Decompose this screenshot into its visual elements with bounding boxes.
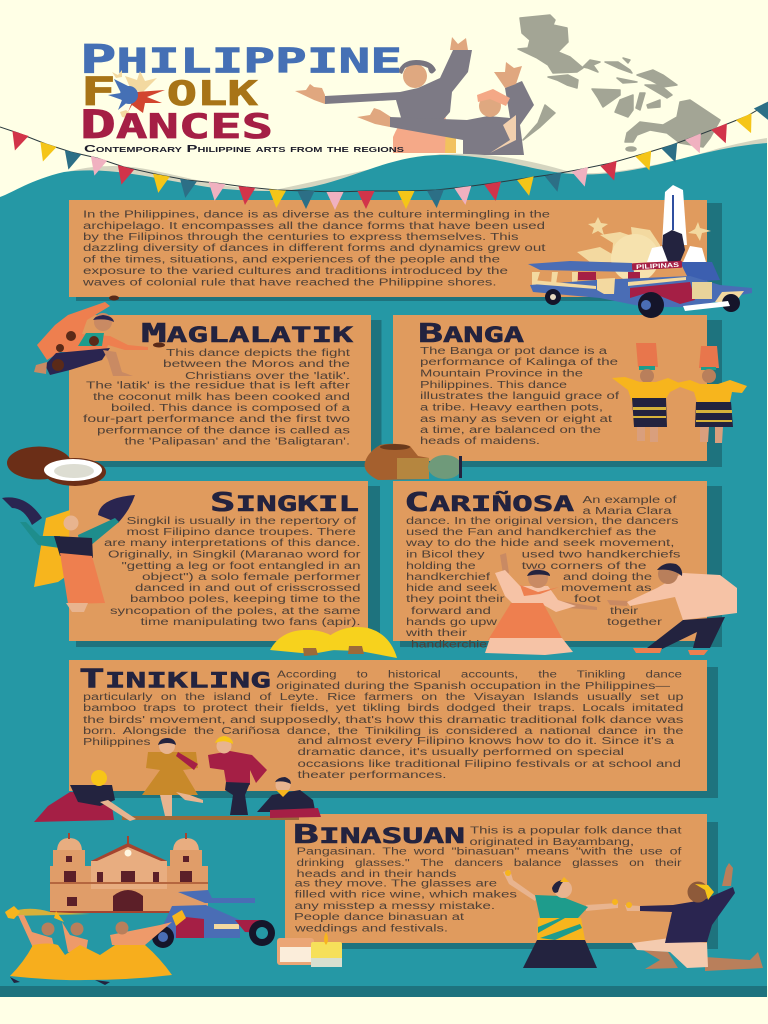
Tinikling text: occasions like traditional Filipino festivals or at school and [298,759,681,770]
Tinikling text: born. Alongside the Cariñosa dance, the Tinikiling is considered a national dance in the [83,726,684,737]
Binasuan text: originated in Bayambang, [470,837,634,848]
icon: jeepney and monument: PILIPINAS [636,262,680,271]
Maglalatik text: the coconut milk has been cooked and [93,392,350,403]
Cariñosa text: forward and [411,606,491,617]
Cariñosa text: their [610,606,639,617]
Banga text: Mountain Province in the [420,368,584,380]
panel: Cariñosa [393,481,722,650]
Singkil text: most Filipino dance troupes. There [126,527,357,538]
Maglalatik text: The 'latik' is the residue that is left after [86,380,351,392]
Tinikling text: bamboo traps to protect their fields, yet tikling birds dodged their traps. Locals imitated [83,703,684,714]
intro text: of the times, situations, and experiences of the people and the [83,254,501,266]
Maglalatik text: This dance depicts the fight [166,348,350,359]
Cariñosa text: and doing the [563,572,653,583]
bunting flags [0,101,768,210]
Tinikling text: dramatic dance, it's usually performed on special [298,747,624,758]
Cariñosa text: with their [404,628,468,639]
Banga text: heads of maidens. [420,436,540,447]
panel: introduction [69,200,722,301]
Singkil text: Originally, in Singkil (Maranao word for [108,550,362,560]
Tinikling text: particularly on the island of Leyte. Rice farmers on the Visayan Islands usually set up [83,692,684,703]
Maglalatik text [83,348,351,448]
Cariñosa text: handkerchie [411,640,488,650]
icon: Binasuan couple [503,863,763,971]
Maglalatik text: four-part performance and the first two [83,414,351,425]
Cariñosa text: they point their [406,594,506,605]
Tinikling text: the birds' movement, and supposedly, that's how this dramatic traditional folk dance was [83,715,684,726]
title line: Folk: F OLK [81,69,258,115]
Singkil text: Singkil is usually in the repertory of [126,516,356,527]
seated woman [34,770,136,822]
title line: Philippine: P HILIPPINE [80,38,402,82]
icon: yellow fans [270,627,397,658]
Banga text: illustrates the languid grace of [420,391,619,402]
Banga text: The Banga or pot dance is a [420,346,608,357]
Maglalatik text: boiled. This dance is composed of a [111,403,351,414]
man in red [208,736,267,815]
Maglalatik text: Christians over the 'latik'. [185,371,350,382]
heading: Maglalatik: M AGLALATIK [141,319,354,349]
icon: coconut [7,446,106,486]
panel: Maglalatik [69,315,382,467]
Cariñosa text: An example of [582,495,677,506]
Binasuan text: as they move. The glasses are [294,878,498,890]
panel: Singkil [69,481,380,647]
icon: Tinikling dancers [34,736,321,822]
Banga text: a time, are balanced on the [420,425,602,436]
icon: Singkil dancer [2,495,135,612]
intro text: dazzling diversity of dances in different forms and dynamics grew out [83,243,546,254]
Tinikling text: and almost every Filipino knows how to do it. Since it's a [298,736,675,747]
Cariñosa text: holding the [406,561,476,572]
Binasuan woman [503,870,618,968]
Tinikling text: According to historical accounts, the Tinikling dance [277,670,683,680]
intro text: archipelago. It encompasses all the dance forms that have been used [83,221,545,232]
title line: Dances: D ANCES [80,103,273,148]
icon: tricycle [152,890,275,948]
Singkil text: danced in and out of crisscrossed [135,583,360,594]
Cariñosa woman [485,553,597,655]
Cariñosa man [607,563,737,655]
Banga text: as many as seven or eight at [420,414,612,425]
Maglalatik text: performance of the dance is called as [97,426,350,436]
Cariñosa text: hands go upw [406,617,498,628]
Tinikling text: Philippines [83,737,151,748]
icon: candles [277,932,342,967]
Cariñosa text: used two handkerchiefs [522,550,681,560]
Binasuan text: any misstep a messy mistake. [294,901,495,912]
Cariñosa text: a Maria Clara [582,506,672,517]
Cariñosa text: way to do the hide and seek movement, [404,538,674,549]
intro text: by the Filipinos through the centuries to express themselves. This [83,232,519,243]
Cariñosa text: two corners of the [522,561,647,572]
title [80,38,405,155]
footer band [0,986,767,997]
Binasuan man [625,863,763,971]
heading: Singkil: S INGKIL [210,488,359,518]
panel: Binasuan [285,814,718,949]
intro text [81,210,551,288]
Binasuan text: Pangasinan. The word "binasuan" means "with the use of [296,846,682,858]
heading: Tinikling: T INIKLING [79,665,271,695]
dancer two [672,346,747,443]
Cariñosa text: handkerchief [406,572,490,583]
Tinikling text [83,670,684,781]
Cariñosa text: dance. In the original version, the dancers [406,516,679,527]
Tinikling text: originated during the Spanish occupation in the Philippines— [276,681,670,692]
icon: Philippine sun [108,70,165,118]
icon: jeepney and monument [528,185,752,318]
Binasuan text: drinking glasses." The dancers balance glasses on their [296,858,683,869]
kneeling man [257,777,321,818]
Banga text: performance of Kalinga of the [420,357,619,368]
Binasuan text: weddings and festivals. [293,924,448,934]
heading: Cariñosa: C ARIÑOSA [404,488,575,518]
Banga text [420,346,619,447]
Binasuan text: People dance binasuan at [294,912,464,923]
Tinikling text: theater performances. [298,770,446,781]
Binasuan text: heads and in their hands [296,869,457,880]
Singkil text: syncopation of the poles, at the same [110,606,361,617]
beige wave [50,138,767,200]
Binasuan text [293,826,683,934]
Singkil text: are many interpretations of this dance. [104,538,360,549]
Singkil text [104,516,362,628]
Binasuan text: filled with rice wine, which makes [294,890,517,900]
intro text: exposure to the varied cultures and traditions introduced by the [83,266,509,277]
Singkil text: "getting a leg or foot entangled in an [122,561,360,572]
woman in stripes [142,738,203,816]
subtitle: Contemporary Philippine arts from the regions [84,143,405,155]
Cariñosa text: in Bicol they [406,550,485,560]
Banga text: a tribe. Heavy earthen pots, [420,402,603,414]
panel: Banga [393,315,722,467]
Binasuan text: This is a popular folk dance that [470,826,682,836]
icon: church [5,833,208,916]
icon: map of the Philippines [518,15,720,151]
title dancers [295,37,534,155]
panel: Tinikling [69,660,718,798]
Cariñosa text: used the Fan and handkerchief as the [406,527,657,538]
Cariñosa text: hide and seek [406,583,497,594]
intro text: In the Philippines, dance is as diverse as the culture intermingling in the [83,210,551,220]
Cariñosa text: movement as [561,583,652,594]
dancer one [612,343,684,442]
icon: Banga dancers [612,343,747,443]
icon: Cariñosa couple [485,553,737,655]
heading: Banga: B ANGA [418,319,525,349]
icon: Maglalatik dancer [34,296,165,376]
Singkil text: time manipulating two fans (apir). [140,617,360,628]
Maglalatik text: between the Moros and the [163,359,351,370]
Singkil text: object") a solo female performer [142,572,362,583]
Cariñosa text: foot [574,594,601,605]
Banga text: Philippines. This dance [420,380,568,391]
Cariñosa text: together [607,617,663,628]
Maglalatik text: the 'Palipasan' and the 'Baligtaran'. [124,436,350,448]
icon: clay pots [365,444,462,480]
icon: dancers in yellow skirts [5,906,186,985]
heading: Binasuan: B INASUAN [293,820,465,850]
Cariñosa text [404,495,681,650]
intro text: waves of colonial rule that have reached the Philippine shores. [81,278,496,288]
Singkil text: bamboo poles, keeping time to the [130,594,361,605]
